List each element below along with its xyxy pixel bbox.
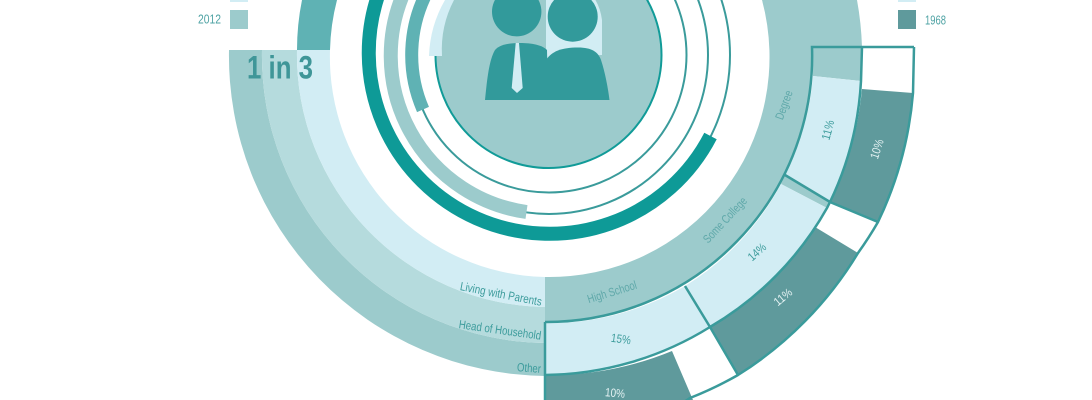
percentages: dark cells: 11% bbox=[771, 285, 795, 309]
percentages: light cells: 14% bbox=[745, 240, 769, 264]
labels: education: Degree bbox=[772, 88, 796, 121]
legend: left bbox=[198, 0, 248, 29]
labels: left bbox=[458, 279, 543, 376]
cells: education ring bbox=[545, 47, 862, 375]
cell outlines bbox=[545, 47, 914, 400]
percentages: light cells: 15% bbox=[610, 331, 632, 347]
inner concentric rings bbox=[368, 0, 730, 236]
light arc on disc bbox=[429, 0, 454, 56]
labels: education: Some College bbox=[700, 194, 750, 246]
legend: left: 2012 bbox=[198, 12, 221, 26]
central disc bbox=[436, 0, 662, 168]
percentages: light cells bbox=[610, 118, 837, 347]
left half rings: household status bbox=[229, 0, 545, 376]
cells: outer dark ring bbox=[545, 89, 913, 400]
legend: right: 1968 bbox=[925, 14, 946, 28]
icon: couple bbox=[485, 0, 610, 100]
icon: bride bbox=[546, 0, 610, 100]
icon: bride veil bbox=[546, 0, 602, 62]
percentages: light cells: 11% bbox=[819, 118, 837, 141]
icon: tie bbox=[512, 43, 523, 93]
stat: 1 in 3: 1 in 3 bbox=[247, 50, 313, 86]
labels: education bbox=[586, 88, 796, 306]
percentages: dark cells: 10% bbox=[867, 137, 887, 161]
percentages: dark cells bbox=[604, 137, 887, 400]
legend: right bbox=[898, 0, 946, 29]
right half band: education 2012 bbox=[545, 0, 862, 322]
labels: left: Living with Parents bbox=[459, 279, 543, 309]
labels: left: Other bbox=[517, 360, 541, 376]
labels: education: High School bbox=[586, 278, 638, 306]
icon: groom bbox=[485, 0, 548, 100]
labels: left: Head of Household bbox=[458, 317, 542, 343]
